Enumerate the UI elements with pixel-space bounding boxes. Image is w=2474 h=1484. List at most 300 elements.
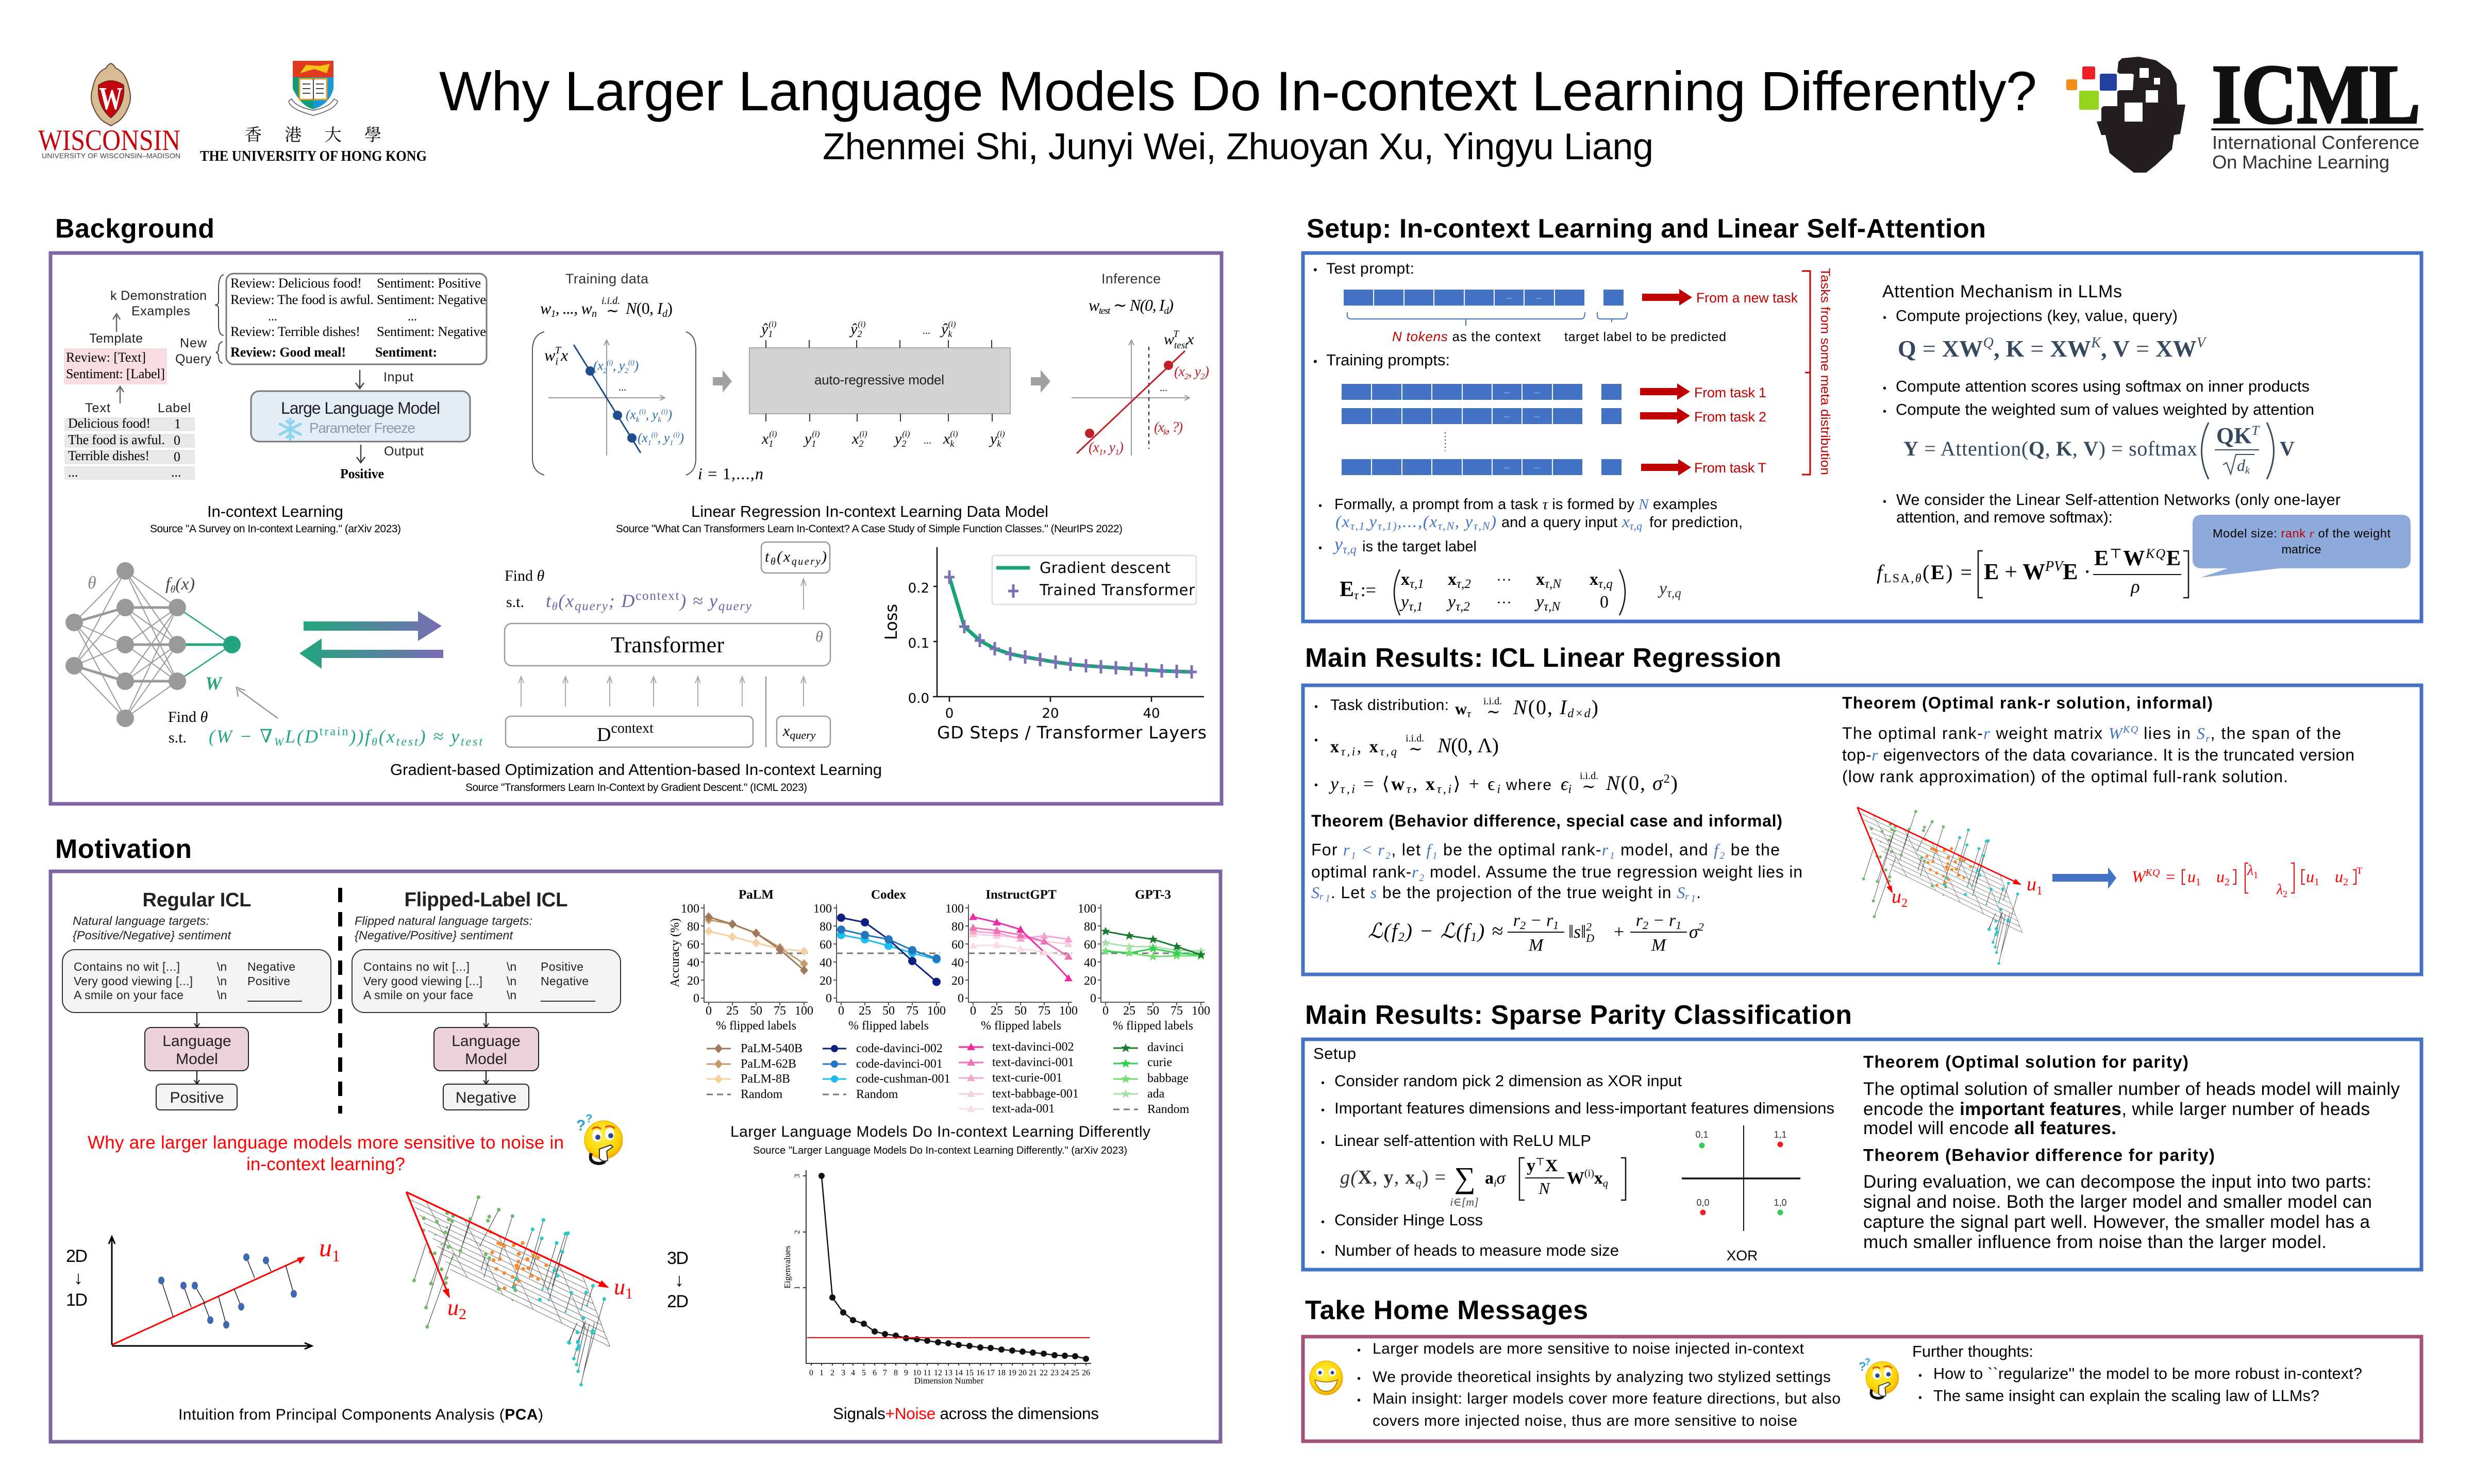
text: further thoughts: The same insight can explain the scaling law of LLMs?	[1933, 1387, 2319, 1405]
text: theorem optimal rank-r	[1842, 694, 2354, 786]
logo: University of Wisconsin: UNIVERSITY OF WISCONSIN–MADISON	[42, 151, 180, 160]
text: prompt definition: •	[1318, 543, 1322, 554]
chart: GPT-3 accuracy: 80	[1084, 920, 1096, 934]
formula: E matrix: τ,N	[1544, 600, 1561, 614]
diagram: training prompts: ...	[1534, 462, 1540, 470]
text: take home bullets: •	[1357, 1395, 1361, 1406]
text: task distribution: i	[1568, 783, 1572, 796]
formula: WKQ decomposition: 2	[2343, 876, 2348, 888]
diagram: XOR: 0,1	[1695, 1129, 1709, 1140]
text: linear self-attention: attention, and remove softmax):	[1896, 509, 2113, 526]
text: parity setup: •	[1321, 1137, 1325, 1149]
diagram: regular ICL: Positive	[247, 974, 290, 988]
formula: g function: σ	[1497, 1169, 1506, 1188]
diagram: neural network: L(D	[285, 726, 318, 747]
legend: Codex: code-cushman-001	[856, 1072, 950, 1086]
diagram: in-context learning prompt: 0	[174, 433, 180, 448]
chart: GPT-3 accuracy: 25	[1123, 1004, 1135, 1018]
text: task distribution: 2	[1664, 772, 1670, 786]
text: linear self-attention: •	[1883, 496, 1886, 508]
formula: attention: T	[2251, 423, 2260, 438]
diagram: regular ICL: Regular ICL	[142, 889, 252, 911]
formula: LSA: E	[2094, 547, 2109, 570]
text: further thoughts: •	[1918, 1392, 1922, 1404]
diagram: transformer: ) ≈ y	[679, 591, 717, 611]
diagram: transformer: t	[546, 591, 551, 611]
diagram: training data: i.i.d.	[601, 295, 620, 307]
chart: eigenvalues scree plot: 3	[793, 1174, 801, 1178]
text: prompt definition: is the target label	[1362, 538, 1477, 555]
text: task distribution: = ⟨	[1357, 773, 1390, 794]
diagram: training data: n	[592, 308, 597, 319]
chart: GPT-3 accuracy: 60	[1084, 938, 1096, 952]
formula: LSA: KQ	[2145, 546, 2165, 561]
panel: Main Results ICL Linear Regression	[1303, 685, 2421, 974]
formula: loss difference: ℒ(f	[1368, 919, 1397, 942]
diagram: training data: )	[678, 430, 684, 445]
chart: GPT-3 accuracy: % flipped labels	[1113, 1019, 1193, 1033]
diagram: training prompts: From task 1	[1694, 385, 1766, 400]
icon: smiling face	[1310, 1361, 1343, 1395]
chart: PCA 2D to 1D: 1	[332, 1246, 340, 1265]
chart: PaLM accuracy: 25	[726, 1004, 739, 1018]
chart: InstructGPT accuracy: % flipped labels	[981, 1019, 1061, 1033]
diagram: flipped-label ICL: \n	[507, 960, 516, 973]
formula: LSA: θ	[1915, 572, 1921, 585]
text: take home bullets: covers more injected noise, thus are more sensitive to noise	[1373, 1412, 1797, 1429]
chart: Codex accuracy: 0	[838, 1004, 844, 1018]
formula: loss difference: M	[1528, 936, 1544, 955]
chart: PaLM accuracy: 0	[706, 1004, 712, 1018]
arrow: attention to gradient	[299, 638, 443, 669]
chart: GPT-3 accuracy: 75	[1171, 1004, 1183, 1018]
chart: PCA 2D to 1D: u	[319, 1233, 332, 1262]
text: theorem behavior difference: Theorem (Behavior difference, special case and informal)	[1311, 812, 1782, 830]
formula: loss difference: 1	[1676, 919, 1681, 932]
text: task distribution: i.i.d.	[1580, 770, 1598, 782]
diagram: neural network: (x	[379, 726, 395, 747]
formula: LSA	[1877, 546, 2188, 598]
diagram: test prompt	[1313, 260, 1798, 344]
panel: Setup	[1303, 253, 2421, 621]
diagram: neural network: θ	[372, 735, 377, 748]
diagram: training data: 2	[625, 367, 629, 375]
text: take home bullets: We provide theoretical insights by analyzing two stylized settings	[1373, 1369, 1831, 1386]
diagram: transformer: D	[597, 724, 611, 746]
label: 3D to 2D: ↓	[675, 1269, 684, 1290]
text: attention mechanism: Q	[1983, 335, 1994, 351]
diagram: flipped-label ICL: Negative	[456, 1089, 516, 1106]
logo: University of Wisconsin: WISCONSIN	[38, 124, 180, 157]
diagram: auto-regressive model: x	[852, 430, 859, 447]
diagram: training prompts	[1313, 351, 1766, 476]
diagram: transformer: ; D	[609, 591, 634, 611]
text: task distribution: N(0, Λ)	[1437, 734, 1499, 757]
diagram: in-context learning prompt: Large Language Model	[281, 399, 440, 417]
diagram: in-context learning prompt: Sentiment:	[375, 345, 437, 360]
diagram: auto-regressive model: (i)	[950, 430, 958, 439]
text: theorem behavior difference: Sᵣ₁. Let s be the projection of the true weight in Sᵣ₁.	[1311, 883, 1701, 902]
diagram: regular ICL: Positive	[170, 1089, 224, 1106]
text: task distribution: x	[1369, 737, 1378, 756]
diagram: training data: , y	[658, 430, 670, 445]
icon: thinking face: ?	[586, 1112, 592, 1125]
text: theorem optimal rank-r: r	[2205, 733, 2210, 745]
text: task distribution: •	[1314, 735, 1318, 746]
chart: InstructGPT accuracy: 0	[958, 992, 964, 1005]
diagram: training data: (x	[593, 358, 604, 373]
diagram: training data: 1	[550, 308, 556, 319]
formula: WKQ decomposition: u	[2216, 867, 2225, 886]
formula: LSA: LSA,	[1884, 572, 1914, 585]
formula: E matrix: ···	[1496, 594, 1512, 611]
formula: g function: ) =	[1422, 1167, 1446, 1188]
diagram: regular ICL: {Positive/Negative} sentiment	[73, 929, 231, 942]
diagram: regular ICL: Negative	[247, 960, 295, 973]
text: theorem optimal solution for parity: model will encode all features.	[1863, 1118, 2116, 1138]
diagram: neural network: ) ≈ y	[419, 726, 459, 747]
diagram: training prompts: From task T	[1694, 460, 1766, 476]
legend: InstructGPT: text-curie-001	[992, 1071, 1062, 1085]
diagram: in-context learning prompt: Sentiment: Negative	[377, 292, 486, 307]
diagram: in-context learning prompt: New	[180, 336, 207, 350]
formula: loss difference: 2	[1520, 919, 1526, 932]
text: task distribution: N(0, σ	[1606, 771, 1663, 795]
chart: InstructGPT accuracy: 100	[945, 902, 964, 916]
formula: g function: a	[1485, 1169, 1494, 1188]
diagram: regular ICL: Very good viewing [...]	[74, 974, 193, 988]
chart: PCA 2D to 1D: 2D	[66, 1246, 88, 1266]
formula: loss difference	[1368, 911, 1704, 955]
diagram: regular ICL: Language	[162, 1033, 231, 1050]
diagram: transformer: (x	[558, 591, 574, 611]
arrow: gradient to attention	[304, 611, 442, 641]
formula: loss difference: M	[1651, 936, 1667, 955]
formula: loss difference: 2	[1398, 931, 1405, 944]
text: task distribution: x	[1426, 773, 1435, 794]
diagram: auto-regressive model: ŷ	[941, 321, 948, 338]
diagram: in-context learning prompt: Label	[158, 401, 191, 415]
formula: WKQ decomposition: u	[2306, 867, 2314, 886]
icon: thinking face: ?	[1859, 1360, 1866, 1374]
formula: g function: W	[1567, 1169, 1584, 1188]
formula: loss difference: − r	[1648, 911, 1676, 930]
callout: model size: matrice	[2281, 543, 2321, 556]
diagram: training data: (i)	[607, 359, 613, 367]
chart: GPT-3 accuracy: 100	[1078, 902, 1096, 916]
diagram: XOR: XOR	[1727, 1247, 1758, 1263]
diagram: training prompts: ...	[1504, 386, 1510, 395]
formula: E matrix: :=	[1361, 580, 1376, 600]
formula: E matrix: τ,2	[1457, 577, 1471, 591]
caption: larger language models	[730, 1123, 1150, 1156]
legend: InstructGPT: text-babbage-001	[992, 1087, 1079, 1101]
diagram: inference: 2	[1200, 372, 1205, 381]
text: prompt definition: τ,N	[1474, 519, 1491, 532]
formula: LSA: ρ	[2130, 576, 2140, 597]
diagram: transformer: t	[765, 548, 769, 565]
chart: eigenvalues scree plot: 20	[1018, 1369, 1027, 1377]
chart: eigenvalues scree plot: 1	[820, 1369, 824, 1377]
text: task distribution: τ,i	[1341, 783, 1355, 796]
legend: GPT-3: davinci	[1147, 1041, 1184, 1054]
caption: larger language models: Source "Larger Language Models Do In-context Learning Differently." (arXiv 2023)	[753, 1145, 1127, 1156]
diagram: training prompts: ...	[1504, 411, 1510, 419]
formula: E matrix: τ,q	[1667, 586, 1681, 600]
diagram: inference: k	[1163, 427, 1167, 437]
diagram: auto-regressive model: (i)	[768, 320, 776, 329]
diagram: inference: )	[1203, 364, 1209, 380]
text: attention mechanism: Q = XW	[1898, 335, 1983, 362]
text: task distribution: where	[1506, 777, 1551, 794]
diagram: in-context learning prompt: Query	[175, 352, 211, 366]
text: theorem optimal rank-r: The optimal rank-r weight matrix W	[1842, 724, 2122, 743]
formula: g function	[1340, 1156, 1626, 1208]
diagram: flipped-label ICL: Model	[465, 1051, 507, 1068]
panel: Motivation	[51, 871, 1221, 1442]
formula: loss difference: σ	[1689, 921, 1698, 942]
text: task distribution: •	[1314, 780, 1318, 791]
formula: g function: q	[1416, 1176, 1422, 1189]
chart: eigenvalues scree plot: 26	[1082, 1369, 1090, 1377]
formula: WKQ decomposition: u	[2335, 867, 2343, 886]
formula: g function: ⊤	[1535, 1156, 1545, 1168]
chart: PCA 2D to 1D: 1D	[66, 1290, 88, 1310]
chart: PaLM accuracy: Accuracy (%)	[668, 918, 682, 987]
chart: eigenvalues scree plot: 12	[934, 1369, 942, 1377]
chart: InstructGPT accuracy: 100	[1059, 1004, 1078, 1018]
formula: g function: N	[1538, 1179, 1550, 1198]
diagram: auto-regressive model: (i)	[812, 430, 820, 439]
chart: rank-r projection	[1858, 807, 2043, 965]
panel: Take Home Messages	[1303, 1337, 2421, 1441]
diagram: training data: T	[555, 345, 562, 356]
diagram: inference	[1072, 271, 1209, 457]
diagram: regular ICL: Model	[176, 1051, 218, 1068]
text: task distribution: w	[1455, 699, 1467, 718]
icon: thinking face: ?	[576, 1117, 586, 1134]
text: theorem behavior difference	[1311, 812, 1802, 902]
chart: PCA 3D to 2D	[406, 1192, 633, 1387]
caption: in-context learning: In-context Learning	[207, 502, 343, 520]
diagram: training data: , y	[613, 358, 625, 373]
chart: PCA 2D to 1D: ↓	[74, 1267, 83, 1288]
formula: loss difference: 2	[1698, 920, 1704, 933]
diagram: auto-regressive model: k	[950, 439, 955, 449]
chart: InstructGPT accuracy: 80	[951, 920, 964, 934]
diagram: training data: ...	[618, 382, 626, 393]
chart: InstructGPT accuracy: 25	[991, 1004, 1003, 1018]
formula: WKQ decomposition: u	[2187, 867, 2196, 886]
formula: loss difference: 2	[1586, 920, 1592, 933]
diagram: neural network: W	[274, 735, 285, 748]
diagram: flipped-label ICL: A smile on your face	[363, 988, 473, 1002]
formula: loss difference: r	[1636, 911, 1643, 930]
text: prompt definition: •	[1318, 500, 1322, 512]
logo: University of Hong Kong: 香 港 大 學	[245, 126, 381, 145]
text: further thoughts: Further thoughts:	[1912, 1342, 2033, 1360]
diagram: auto-regressive model: (i)	[769, 430, 777, 439]
formula: loss difference: − r	[1526, 911, 1553, 930]
caption: gradient and attention	[390, 761, 882, 794]
diagram: auto-regressive model: y	[990, 430, 997, 447]
caption: PCA intuition: Intuition from Principal Components Analysis (PCA)	[178, 1406, 543, 1423]
text: parity setup: Important features dimensions and less-important features dimensions	[1334, 1099, 1834, 1117]
chart: eigenvalues scree plot: 15	[965, 1369, 974, 1377]
text: prompt definition	[1318, 496, 1743, 556]
chart: InstructGPT accuracy: 75	[1038, 1004, 1050, 1018]
text: attention mechanism: •	[1883, 406, 1886, 417]
text: prompt definition: Formally, a prompt from a task τ is formed by N examples	[1334, 496, 1717, 513]
chart: eigenvalues scree plot: 5	[862, 1369, 866, 1377]
formula: WKQ decomposition: λ	[2277, 882, 2283, 898]
text: take home bullets: Main insight: larger models cover more feature directions, but also	[1373, 1390, 1841, 1407]
chart: GPT-3 accuracy: 0	[1102, 1004, 1109, 1018]
chart legend: Trained Transformer	[1039, 581, 1195, 599]
caption: signals plus noise: Signals+Noise across the dimensions	[833, 1404, 1099, 1423]
diagram: auto-regressive model: 2	[859, 439, 863, 449]
diagram: training data: i = 1,...,n	[698, 464, 763, 483]
text: prompt definition: τ,1)	[1378, 519, 1397, 532]
chart: eigenvalues scree plot: 24	[1061, 1369, 1069, 1377]
diagram: regular ICL	[62, 889, 331, 1110]
diagram: transformer: context	[611, 720, 654, 736]
diagram: neural network: ))f	[348, 726, 373, 747]
chart: eigenvalues scree plot: 16	[976, 1369, 984, 1377]
diagram: in-context learning prompt: ...	[268, 310, 277, 324]
formula: LSA: ·	[2078, 559, 2091, 584]
formula: loss difference: 1	[1553, 919, 1559, 932]
chart: eigenvalues scree plot: 18	[997, 1369, 1006, 1377]
heading: Setup: Setup: In-context Learning and Linear Self-Attention	[1307, 214, 1986, 244]
chart: eigenvalues scree plot: 13	[944, 1369, 952, 1377]
diagram: transformer: x	[783, 722, 790, 739]
diagram: in-context learning prompt: Review: [Text]	[66, 350, 146, 365]
chart: eigenvalues scree plot	[782, 1170, 1091, 1386]
diagram: in-context learning prompt: Parameter Freeze	[309, 420, 415, 436]
diagram: in-context learning prompt: ...	[68, 465, 78, 480]
formula: E matrix: y	[1401, 593, 1409, 612]
diagram: neural network: W	[205, 673, 223, 694]
diagram: regular ICL: \n	[217, 988, 227, 1002]
chart: Codex accuracy: Codex	[871, 888, 907, 902]
chart: eigenvalues scree plot: 7	[883, 1369, 887, 1377]
chart: eigenvalues scree plot: 3	[841, 1369, 845, 1377]
formula: g function: y	[1527, 1156, 1535, 1175]
formula: LSA: E	[2063, 559, 2078, 584]
diagram: flipped-label ICL: Flipped-Label ICL	[404, 889, 568, 911]
text: parity setup	[1313, 1044, 1834, 1259]
text: theorem behavior difference for parity: signal and noise. Both the larger model and smaller model can	[1863, 1192, 2372, 1212]
authors: Zhenmei Shi, Junyi Wei, Zhuoyan Xu, Yingyu Liang	[823, 126, 1653, 167]
chart: GPT-3 accuracy: 20	[1084, 974, 1096, 988]
diagram: training prompts: ...	[1534, 411, 1540, 419]
diagram: regular ICL: \n	[217, 974, 227, 988]
diagram: training data: d	[662, 308, 668, 319]
diagram: training prompts: ...	[1504, 462, 1510, 470]
text: task distribution: ∼	[1582, 777, 1596, 796]
formula: loss difference: ) − ℒ(f	[1405, 919, 1472, 942]
text: theorem behavior difference for parity: capture the signal part well. However, the smaller model has a	[1863, 1212, 2370, 1232]
chart: eigenvalues scree plot: 23	[1050, 1369, 1059, 1377]
chart: eigenvalues scree plot: 10	[913, 1369, 921, 1377]
diagram: auto-regressive model: 2	[901, 439, 906, 449]
chart: eigenvalues scree plot: 21	[1029, 1369, 1037, 1377]
formula: E matrix: y	[1448, 593, 1456, 612]
diagram: test prompt: ...	[1536, 292, 1542, 300]
formula: WKQ decomposition: 2	[2225, 876, 2230, 888]
formula: LSA: E) =	[1931, 561, 1972, 584]
line chart: loss vs GD steps	[881, 547, 1207, 743]
logo: University of Wisconsin	[38, 63, 180, 160]
text: theorem optimal solution for parity: The optimal solution of smaller number of heads model will mainly	[1863, 1079, 2400, 1099]
formula: attention	[1903, 423, 2295, 479]
diagram: neural network	[65, 562, 483, 749]
diagram: transformer: θ	[552, 600, 558, 613]
formula: loss difference: D	[1585, 932, 1594, 945]
text: theorem optimal rank-r: (low rank approximation) of the optimal full-rank solution.	[1842, 767, 2288, 786]
arrow: projection to decomposition	[2052, 867, 2116, 889]
chart: GPT-3 accuracy: 0	[1090, 992, 1096, 1005]
chart: Codex accuracy: 25	[859, 1004, 871, 1018]
text: prompt definition: and a query input	[1501, 514, 1617, 531]
legend: Codex: Random	[856, 1088, 898, 1101]
text: prompt definition: τ,N	[1438, 519, 1455, 532]
icon: thinking face	[1859, 1357, 1899, 1398]
diagram: in-context learning prompt: ...	[408, 310, 417, 324]
formula: LSA: E	[2166, 547, 2181, 570]
formula: g function: i	[1494, 1178, 1497, 1189]
legend: GPT-3	[1113, 1041, 1190, 1116]
text: take home bullets: •	[1357, 1373, 1361, 1385]
heading: Main Results Sparse Parity: Main Results: Sparse Parity Classification	[1305, 1000, 1852, 1030]
diagram: inference: d	[1164, 306, 1169, 316]
formula: E matrix: y	[1536, 593, 1544, 612]
legend: InstructGPT: text-davinci-001	[992, 1056, 1074, 1069]
diagram: training prompts: Training prompts:	[1326, 351, 1450, 369]
diagram: in-context learning prompt: Review: Good meal!	[230, 345, 346, 360]
diagram: inference: T	[1173, 329, 1179, 340]
text: task distribution: d×d	[1567, 707, 1591, 720]
formula: g function: g(X, y, x	[1340, 1167, 1415, 1188]
text: task distribution: N(0, I	[1513, 696, 1566, 719]
diagram: in-context learning prompt: Template	[89, 331, 143, 346]
text: theorem behavior difference for parity: Theorem (Behavior difference for parity)	[1863, 1145, 2215, 1165]
heading: Background: Background	[55, 214, 214, 244]
formula: E matrix: x	[1448, 570, 1457, 589]
diagram: inference: , y	[1102, 440, 1116, 456]
chart: PaLM accuracy: 100	[795, 1004, 813, 1018]
chart: Codex accuracy: 75	[906, 1004, 918, 1018]
chart: PaLM accuracy: 20	[687, 974, 699, 988]
diagram: transformer: context	[636, 589, 679, 603]
diagram: transformer: θ	[815, 628, 823, 645]
diagram: flipped-label ICL	[352, 889, 621, 1110]
formula: E matrix: y	[1659, 579, 1667, 598]
caption: in-context learning	[150, 502, 401, 535]
formula: LSA: PV	[2045, 559, 2064, 575]
text: take home bullets: Larger models are more sensitive to noise injected in-context	[1373, 1340, 1804, 1357]
legend: InstructGPT	[959, 1040, 1079, 1116]
diagram: auto-regressive model: ...	[924, 435, 931, 446]
chart: InstructGPT accuracy: 50	[1014, 1004, 1027, 1018]
chart: eigenvalues scree plot: 1	[793, 1286, 801, 1290]
diagram: inference: x	[1186, 331, 1194, 348]
formula: g function: X	[1545, 1156, 1558, 1175]
legend: PaLM: PaLM-540B	[741, 1042, 803, 1055]
diagram: XOR: 0,0	[1696, 1198, 1710, 1208]
diagram: inference: w	[1164, 331, 1174, 348]
